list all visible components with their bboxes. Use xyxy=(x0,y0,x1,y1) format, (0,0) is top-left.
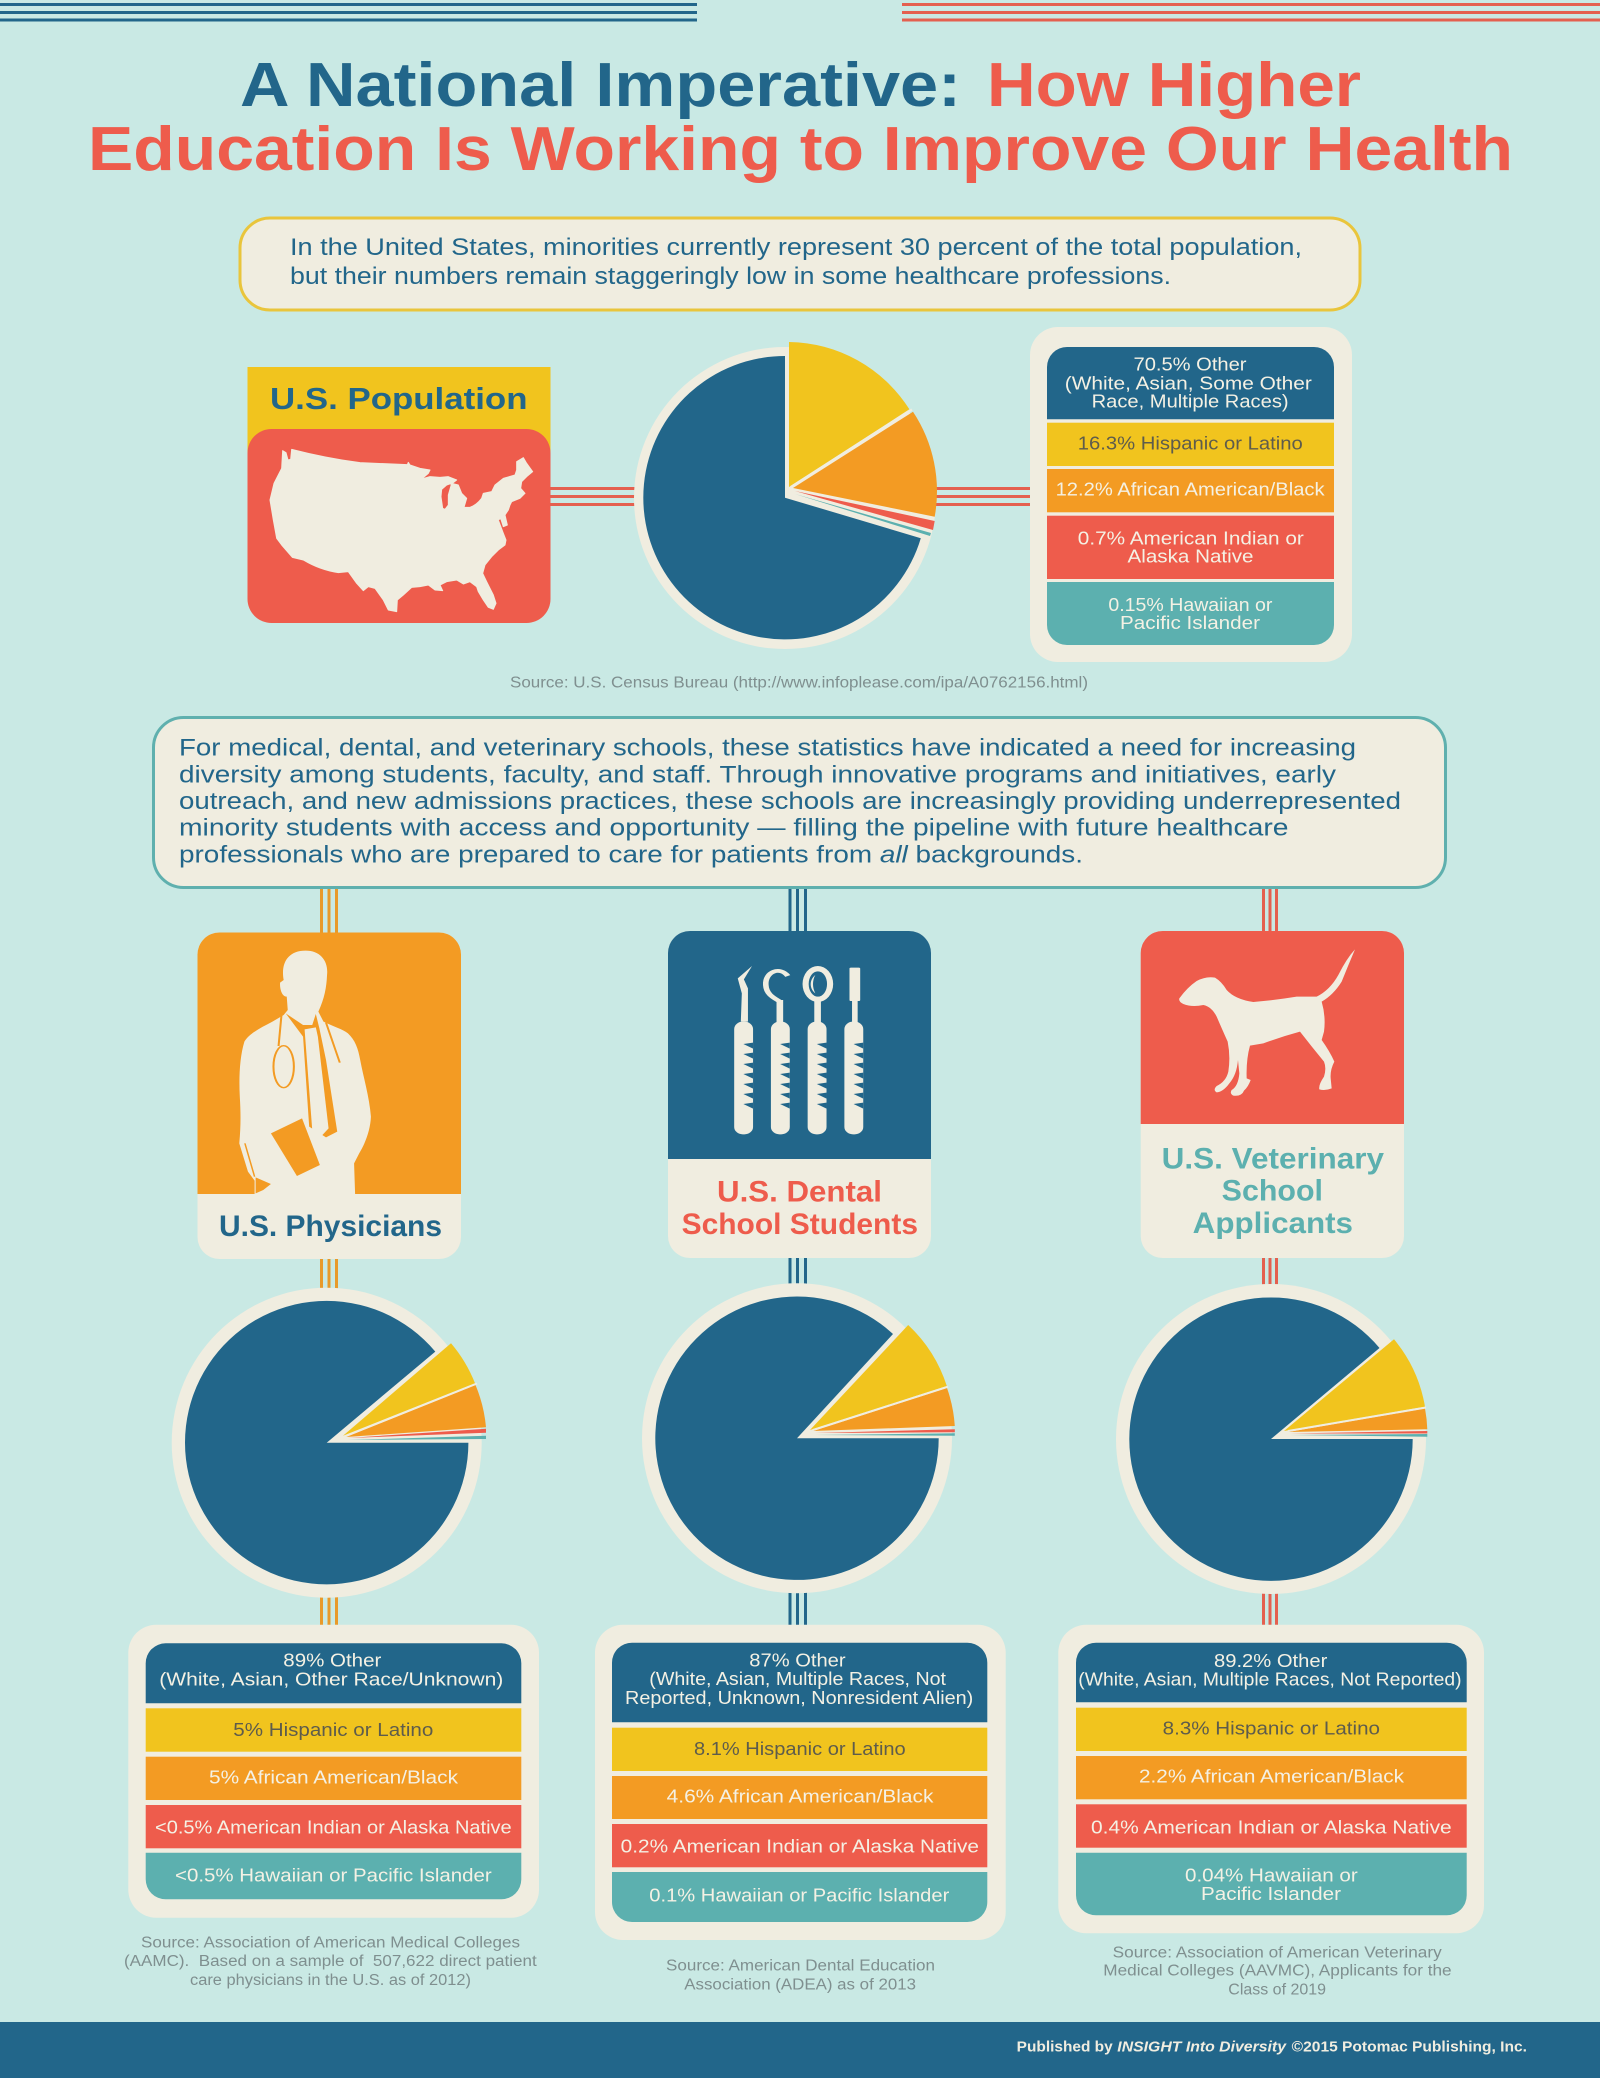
legend: physicians: (White, Asian, Other Race/Unknown) xyxy=(159,1670,503,1690)
card: U.S. Veterinary School Applicants xyxy=(1141,931,1404,1258)
connector: population pie to legend xyxy=(930,487,1032,506)
legend: veterinary applicants: 8.3% Hispanic or Latino xyxy=(1163,1718,1380,1738)
legend: dental students: 0.2% American Indian or Alaska Native xyxy=(621,1837,979,1857)
source: dental xyxy=(666,1958,935,1993)
legend: veterinary applicants: 0.04% Hawaiian or xyxy=(1185,1866,1358,1886)
legend: U.S. population: Alaska Native xyxy=(1128,547,1254,567)
heading: U.S. Veterinary School Applicants: Applicants xyxy=(1193,1207,1353,1240)
legend: physicians: 5% Hispanic or Latino xyxy=(233,1720,433,1740)
intro callout: but their numbers remain staggeringly low in some healthcare professions. xyxy=(290,263,1171,290)
legend: U.S. population: 0.15% Hawaiian or xyxy=(1108,595,1272,615)
legend: U.S. population xyxy=(1030,327,1352,662)
source: physicians: (AAMC). Based on a sample of 507,622 direct patient xyxy=(124,1953,537,1970)
paragraph callout: For medical, dental, and veterinary schools, these statistics have indicated a need for increasing xyxy=(179,735,1356,762)
legend: U.S. population: Race, Multiple Races) xyxy=(1092,392,1289,412)
paragraph callout: outreach, and new admissions practices, these schools are increasingly providing underrepresented xyxy=(179,788,1401,815)
footer bar: INSIGHT Into Diversity xyxy=(1117,2040,1287,2056)
card: U.S. Physicians xyxy=(198,932,461,1259)
paragraph callout: minority students with access and opportunity — filling the pipeline with future healthcare xyxy=(179,815,1288,842)
footer bar xyxy=(0,2022,1600,2078)
pie chart: U.S. population xyxy=(634,342,937,649)
source: veterinary: Medical Colleges (AAVMC), Applicants for the xyxy=(1103,1963,1452,1980)
source: veterinary: Class of 2019 xyxy=(1228,1981,1326,1998)
legend: dental students: 4.6% African American/Black xyxy=(667,1786,935,1806)
pie chart: veterinary applicants xyxy=(1116,1284,1427,1594)
icon: map of the United States xyxy=(270,449,533,612)
legend: veterinary applicants: 89.2% Other xyxy=(1214,1651,1327,1671)
legend: physicians: 5% African American/Black xyxy=(209,1767,459,1787)
heading: U.S. Population: U.S. Population xyxy=(270,381,528,416)
paragraph callout: professionals who are prepared to care for patients from all backgrounds. xyxy=(179,841,1083,868)
icon: dental tools xyxy=(734,966,863,1134)
connector: dental column xyxy=(788,889,807,1626)
legend: dental students: 0.1% Hawaiian or Pacific Islander xyxy=(649,1885,949,1905)
footer bar: Published by xyxy=(1017,2040,1113,2056)
legend: veterinary applicants: 0.4% American Indian or Alaska Native xyxy=(1091,1817,1452,1837)
legend: U.S. population: 12.2% African American/Black xyxy=(1056,480,1326,500)
legend: physicians: 89% Other xyxy=(283,1651,381,1671)
source: dental: Source: American Dental Education xyxy=(666,1958,935,1975)
legend: U.S. population: Pacific Islander xyxy=(1120,613,1260,633)
coral header stripes xyxy=(902,3,1600,22)
legend: dental students: 8.1% Hispanic or Latino xyxy=(694,1739,906,1759)
paragraph callout xyxy=(154,718,1446,888)
legend: dental students xyxy=(595,1625,1006,1940)
title: Education Is Working to Improve Our Health xyxy=(88,115,1513,184)
source: veterinary: Source: Association of American Veterinary xyxy=(1113,1944,1442,1961)
legend: veterinary applicants xyxy=(1058,1625,1484,1933)
connector: veterinary column xyxy=(1262,889,1278,1626)
legend: dental students: 87% Other xyxy=(749,1650,846,1670)
card: U.S. Dental School Students xyxy=(668,931,931,1258)
icon: doctor silhouette xyxy=(239,951,371,1194)
connector: physicians column xyxy=(320,889,338,1626)
footer bar: ©2015 Potomac Publishing, Inc. xyxy=(1292,2040,1527,2056)
heading: U.S. Veterinary School Applicants: U.S. Veterinary xyxy=(1162,1142,1384,1175)
legend: physicians xyxy=(128,1625,539,1918)
intro callout xyxy=(240,218,1360,310)
legend: veterinary applicants: 2.2% African American/Black xyxy=(1139,1767,1405,1787)
legend: U.S. population: 16.3% Hispanic or Latino xyxy=(1078,433,1303,453)
heading: U.S. Physicians: U.S. Physicians xyxy=(219,1210,442,1243)
pie chart: physicians xyxy=(172,1288,486,1598)
panel: U.S. Population xyxy=(248,367,550,623)
blue header stripes xyxy=(0,3,697,22)
legend: veterinary applicants: (White, Asian, Multiple Races, Not Reported) xyxy=(1078,1670,1462,1690)
legend: dental students: (White, Asian, Multiple Races, Not xyxy=(649,1669,946,1689)
title: A National Imperative: xyxy=(240,51,961,120)
heading: U.S. Veterinary School Applicants: School xyxy=(1222,1175,1323,1208)
source: dental: Association (ADEA) as of 2013 xyxy=(684,1976,916,1993)
connector: map to population pie xyxy=(550,487,640,506)
source: veterinary xyxy=(1103,1944,1452,1998)
heading: U.S. Dental School Students: U.S. Dental xyxy=(717,1176,882,1209)
source: physicians: care physicians in the U.S. as of 2012) xyxy=(190,1972,471,1989)
legend: U.S. population: (White, Asian, Some Other xyxy=(1065,373,1312,393)
heading: U.S. Veterinary School Applicants xyxy=(1162,1142,1384,1240)
legend: U.S. population: 0.7% American Indian or xyxy=(1078,528,1304,548)
heading: U.S. Dental School Students xyxy=(682,1176,918,1241)
intro callout: In the United States, minorities currently represent 30 percent of the total population, xyxy=(290,234,1302,261)
source: physicians xyxy=(124,1935,537,1989)
title xyxy=(88,51,1513,184)
legend: physicians: <0.5% American Indian or Alaska Native xyxy=(155,1817,512,1837)
legend: U.S. population: 70.5% Other xyxy=(1134,355,1246,375)
legend: physicians: <0.5% Hawaiian or Pacific Islander xyxy=(175,1866,492,1886)
legend: dental students: Reported, Unknown, Nonresident Alien) xyxy=(625,1688,973,1708)
title: How Higher xyxy=(987,51,1361,120)
icon: dog silhouette xyxy=(1179,949,1355,1096)
legend: veterinary applicants: Pacific Islander xyxy=(1201,1884,1341,1904)
paragraph callout: diversity among students, faculty, and staff. Through innovative programs and initiatives, early xyxy=(179,761,1336,788)
pie chart: dental students xyxy=(642,1283,955,1593)
source: census: Source: U.S. Census Bureau (http://www.infoplease.com/ipa/A0762156.html) xyxy=(510,675,1088,692)
source: physicians: Source: Association of American Medical Colleges xyxy=(141,1935,520,1952)
heading: U.S. Dental School Students: School Students xyxy=(682,1208,918,1241)
